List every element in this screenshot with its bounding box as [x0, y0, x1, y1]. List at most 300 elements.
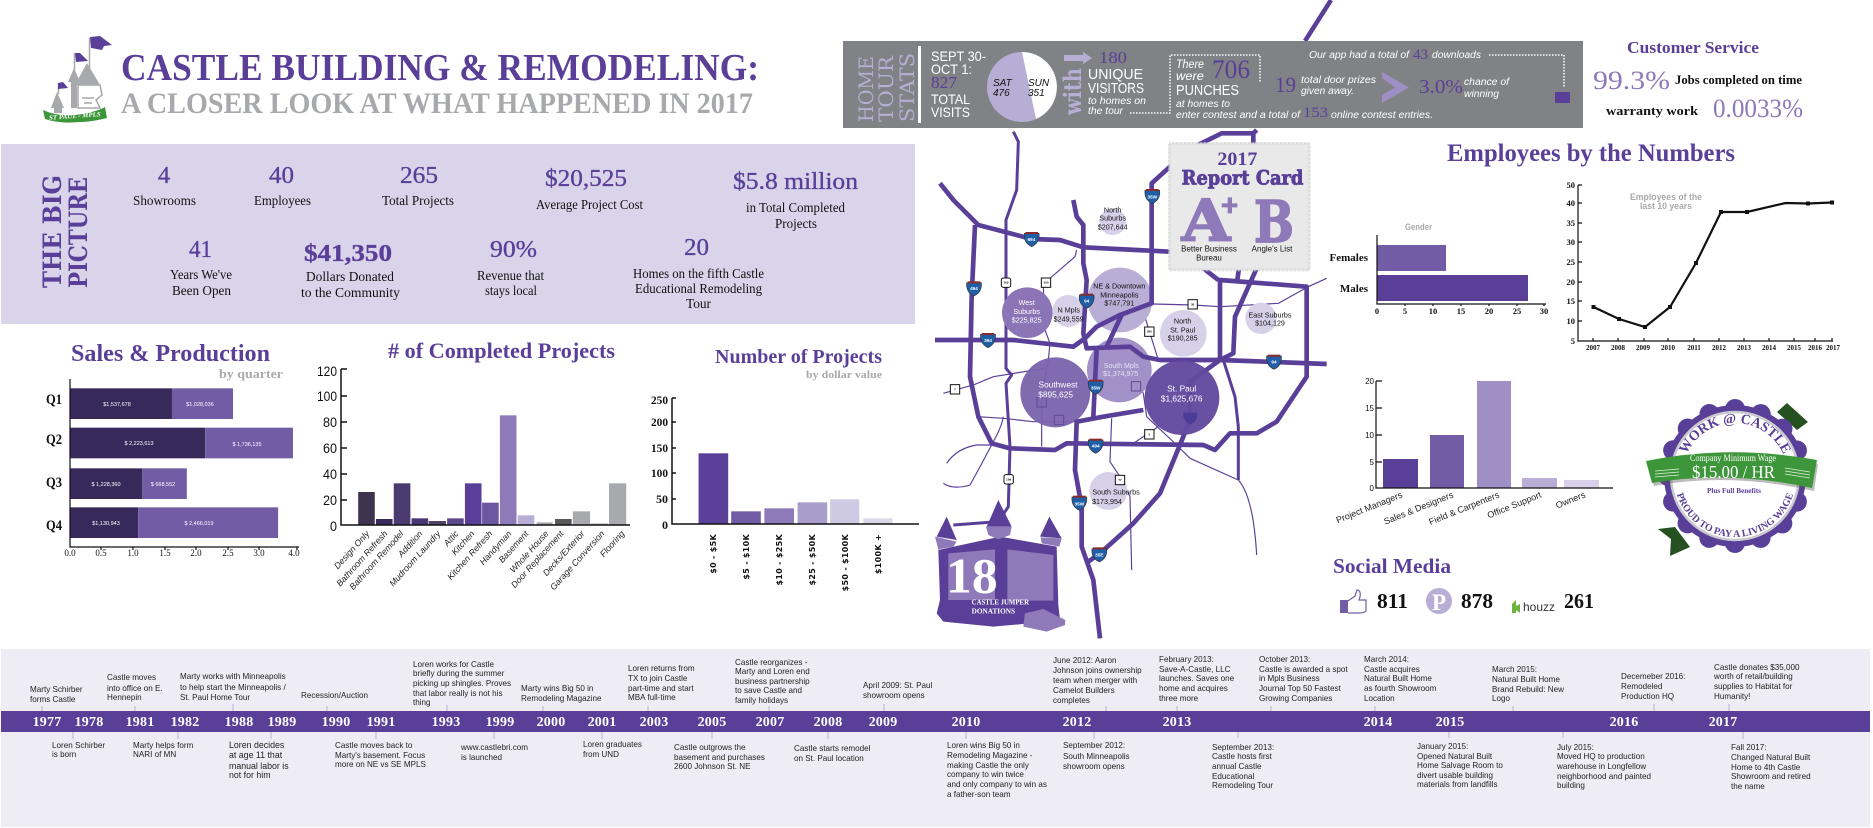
heading: the big picture: THE BIG	[38, 175, 67, 288]
circle: North Suburbs	[1099, 208, 1126, 235]
timeline band with years: 1977	[33, 715, 61, 730]
axis labels: Q4	[46, 518, 62, 534]
timeline events below the band: Remodeling Magazine -	[947, 751, 1033, 760]
stat: punches: 706	[1212, 55, 1250, 84]
route markers: 169	[1006, 477, 1011, 481]
timeline events below the band: Loren graduates	[583, 740, 642, 749]
timeline events below the band: at age 11 that	[229, 750, 283, 760]
icon: purple square	[1555, 92, 1570, 103]
panel: report card: Report Card	[1182, 166, 1304, 189]
panel: social media	[1333, 554, 1594, 615]
timeline band with years: 2005	[698, 715, 726, 730]
stat: total projects: Total Projects	[382, 193, 454, 208]
castle jumper donations	[935, 500, 1065, 632]
stat: chance of winning: winning	[1464, 89, 1499, 100]
chart: employees over last 10 years: 10	[1566, 316, 1575, 326]
timeline band with years: 2015	[1436, 715, 1464, 730]
stat: punches: at homes to	[1176, 99, 1230, 110]
timeline events below the band: January 2015:	[1417, 742, 1468, 751]
x axis ticks: 2.5	[222, 548, 234, 558]
timeline events below the band: not for him	[229, 770, 271, 780]
timeline events above the band: briefly during the summer	[413, 669, 505, 678]
x axis category labels: Addition	[395, 529, 425, 560]
chart: employees by role: 0	[1370, 484, 1375, 493]
timeline events below the band: annual Castle	[1212, 762, 1262, 771]
panel: customer service: 0.0033%	[1713, 94, 1803, 123]
timeline band with years: 2000	[537, 715, 565, 730]
ribbon tails	[1658, 403, 1808, 556]
timeline events below the band: divert usable building	[1417, 771, 1493, 780]
timeline events above the band: that labor really is not his	[413, 689, 503, 698]
timeline band with years: 2003	[640, 715, 668, 730]
stat: total projects: 265	[400, 163, 438, 189]
interstate shields: 35E	[1095, 553, 1103, 558]
circle: East Suburbs	[1245, 303, 1277, 334]
stacked bars: $1,130,943	[92, 521, 120, 527]
x axis labels: $10 - $25K	[775, 534, 784, 586]
timeline events above the band: Hennepin	[107, 693, 142, 702]
stacked bars: $ 2,466,019	[184, 521, 214, 527]
panel: customer service: Jobs completed on time	[1675, 72, 1802, 87]
timeline events above the band	[30, 655, 1800, 707]
x axis labels: $25 - $50K	[808, 534, 817, 586]
chart: employees over last 10 years: 20	[1566, 277, 1575, 287]
timeline events below the band: 2600 Johnson St. NE	[674, 762, 751, 771]
x axis category labels: Decks/Exterior	[541, 528, 587, 578]
stat: unique visitors	[1088, 48, 1146, 117]
timeline events above the band: to save Castle and	[735, 686, 802, 695]
timeline events above the band: Johnson joins ownership	[1053, 666, 1142, 675]
map labels: $173,954	[1092, 498, 1122, 506]
chart: employees over last 10 years: 15	[1566, 296, 1575, 306]
stat: employees	[254, 163, 311, 208]
pie chart: saturday vs sunday visits: SUN	[1028, 78, 1050, 89]
x axis category labels: Door Replacement	[509, 528, 566, 590]
panel: report card: 2017	[1217, 149, 1257, 170]
chart: employees over last 10 years: 2007	[1586, 344, 1600, 352]
timeline band with years: 1978	[75, 715, 103, 730]
map labels: St. Paul	[1167, 384, 1196, 394]
timeline events above the band: March 2014:	[1364, 655, 1409, 664]
stat: employees: Employees	[254, 193, 311, 208]
chart: number of projects by dollar value	[651, 346, 919, 591]
x axis labels: $100K +	[874, 534, 883, 574]
stat: chance of winning: chance of	[1464, 77, 1510, 88]
timeline events below the band: South Minneapolis	[1063, 752, 1130, 761]
timeline band with years: 1993	[432, 715, 460, 730]
timeline events below the band: materials from landfills	[1417, 780, 1498, 789]
stat: homes on tour: Homes on the fifth Castle	[633, 266, 764, 281]
route markers: 7	[954, 387, 956, 391]
icon: pinterest	[1426, 588, 1452, 615]
timeline events above the band: Humanity!	[1714, 692, 1750, 701]
map labels: West	[1019, 299, 1035, 307]
scalloped badge	[1664, 405, 1806, 547]
chart: employees over last 10 years: 2011	[1687, 344, 1701, 352]
map labels: Suburbs	[1013, 308, 1040, 316]
heading: social media: Social Media	[1333, 554, 1452, 578]
timeline events above the band: March 2015:	[1492, 665, 1537, 674]
map labels: $225,825	[1012, 317, 1042, 325]
timeline events above the band: Marty and Loren end	[735, 667, 810, 676]
stat: total visits: VISITS	[931, 104, 970, 120]
timeline events below the band: July 2015:	[1557, 743, 1594, 752]
timeline band with years: 2007	[756, 715, 784, 730]
stat: revenue stays local: stays local	[485, 283, 537, 298]
timeline events above the band: three more	[1159, 694, 1199, 703]
timeline events above the band: Marty works with Minneapolis	[180, 672, 286, 681]
stat: total visits	[931, 48, 986, 120]
stacked bars: $1,537,678	[103, 402, 131, 408]
timeline events above the band: St. Paul Home Tour	[180, 693, 250, 702]
timeline events above the band: Logo	[1492, 694, 1511, 703]
heading: home tour stats: TOUR	[874, 55, 898, 122]
x axis category labels: Attic	[441, 528, 461, 549]
y axis labels: 200	[651, 415, 668, 429]
x axis ticks: 0.0	[64, 548, 76, 558]
chart: employees by role: 10	[1365, 431, 1375, 440]
stat: punches: were	[1176, 69, 1204, 83]
count: pinterest: 878	[1461, 589, 1493, 613]
stat: total visits: TOTAL	[931, 91, 970, 107]
circle: South Mpls	[1087, 338, 1152, 402]
timeline events below the band: more on NE vs SE MPLS	[335, 760, 426, 769]
y axis labels: 100	[317, 388, 337, 404]
chart: employees over last 10 years: 2015	[1787, 344, 1802, 352]
y axis labels: 150	[651, 441, 668, 455]
chart: gender bars	[1330, 222, 1548, 316]
castle jumper donations: DONATIONS	[972, 608, 1015, 616]
timeline events below the band: from UND	[583, 750, 619, 759]
timeline events below the band: Castle hosts first	[1212, 752, 1273, 761]
chart: employees over last 10 years	[1566, 180, 1840, 352]
x axis category labels: Garage Conversion	[548, 529, 607, 592]
panel: report card: A	[1181, 187, 1232, 255]
map labels: North	[1174, 318, 1191, 326]
stat: app downloads: downloads	[1432, 50, 1481, 61]
count: facebook: 811	[1377, 589, 1408, 613]
heading: employees by the numbers: Employees by the Numbers	[1447, 140, 1735, 167]
chart: employees over last 10 years: Employees of the	[1630, 192, 1702, 202]
stat: punches	[1176, 55, 1433, 121]
x axis labels	[709, 534, 883, 591]
bars	[699, 453, 892, 524]
x axis labels: $0 - $5K	[709, 534, 718, 574]
timeline events below the band	[52, 740, 1811, 799]
circle: St Paul	[1145, 360, 1219, 435]
heading: the big picture: PICTURE	[64, 177, 93, 288]
timeline events below the band: Showroom and retired	[1731, 772, 1811, 781]
timeline band with years: 2012	[1063, 715, 1091, 730]
stat: unique visitors: 180	[1099, 48, 1127, 67]
stacked bars: $ 1,228,360	[91, 482, 121, 488]
timeline events above the band: Marty Schirber	[30, 685, 83, 694]
chart: employees by role: Owners	[1554, 489, 1587, 510]
map labels: East Suburbs	[1249, 312, 1292, 320]
timeline events above the band: picking up shingles. Proves	[413, 679, 511, 688]
timeline band with years: 2008	[814, 715, 842, 730]
arrow: with: with	[1058, 68, 1087, 116]
stat: total visits: 827	[931, 73, 958, 92]
timeline events below the band: Marty's basement. Focus	[335, 751, 425, 760]
stat: years open: Been Open	[172, 283, 231, 298]
timeline events below the band: Remodeling Tour	[1212, 781, 1273, 790]
timeline events below the band: building	[1557, 781, 1585, 790]
stat: total completed projects: in Total Completed	[746, 200, 845, 215]
map labels: North	[1104, 207, 1121, 215]
arc text: work at castle: WORK @ CASTLE	[1678, 414, 1791, 454]
timeline events below the band: September 2012:	[1063, 741, 1125, 750]
x axis category labels: Bathroom Refresh	[334, 529, 390, 588]
stat: homes on tour	[633, 235, 764, 311]
chart: employees over last 10 years: 40	[1566, 198, 1575, 208]
axis labels	[46, 392, 62, 534]
chart: gender bars: 15	[1457, 306, 1465, 316]
timeline events below the band: the name	[1731, 782, 1765, 791]
timeline events above the band: Decemeber 2016:	[1621, 672, 1685, 681]
stat: unique visitors: UNIQUE	[1088, 66, 1143, 83]
timeline band with years	[1, 711, 1870, 732]
icon: thumbs up	[1340, 590, 1366, 613]
timeline events above the band: February 2013:	[1159, 655, 1214, 664]
timeline events above the band: Castle acquires	[1364, 665, 1420, 674]
stat: door prizes: given away.	[1301, 86, 1354, 97]
timeline events above the band: Location	[1364, 694, 1395, 703]
stat: punches: enter contest and a total of	[1176, 110, 1301, 121]
timeline events above the band: Journal Top 50 Fastest	[1259, 684, 1341, 693]
stat: punches: online contest entries.	[1331, 110, 1433, 121]
y axis labels: 60	[323, 440, 337, 456]
stat: dollars donated: to the Community	[301, 285, 400, 300]
timeline events below the band: Loren wins Big 50 in	[947, 741, 1020, 750]
x axis category labels: Mudroom Laundry	[387, 528, 443, 588]
y axis labels	[317, 363, 337, 534]
heading: sales and production: Sales & Production	[71, 341, 270, 367]
timeline band with years: 2010	[952, 715, 980, 730]
interstate shields: 494	[970, 286, 978, 291]
pie chart: saturday vs sunday visits: SAT	[993, 78, 1013, 89]
map labels: $104,129	[1255, 320, 1285, 328]
y axis labels: 0	[330, 518, 337, 534]
chart: employees over last 10 years: 35	[1566, 218, 1575, 228]
map labels: St. Paul	[1170, 327, 1196, 335]
chart: gender bars: 20	[1485, 306, 1493, 316]
chart: employees over last 10 years: 2016	[1808, 344, 1822, 352]
y axis labels: 80	[323, 414, 337, 430]
pie chart: saturday vs sunday visits: 476	[993, 88, 1010, 99]
timeline events below the band: company to win twice	[947, 770, 1024, 779]
chart: gender bars: Gender	[1405, 222, 1432, 232]
timeline events above the band: worth of retail/building	[1713, 672, 1793, 681]
y axis labels: 100	[651, 466, 668, 480]
map labels: $249,559	[1054, 316, 1084, 324]
stat: chance of winning	[1419, 76, 1510, 100]
panel: customer service: warranty work	[1606, 103, 1699, 118]
stat: punches: PUNCHES	[1176, 82, 1239, 99]
title: CASTLE BUILDING & REMODELING:	[121, 47, 759, 89]
map labels: $1,374,975	[1103, 371, 1138, 378]
timeline events above the band: June 2012: Aaron	[1053, 656, 1116, 665]
route markers: 100	[1044, 281, 1049, 285]
map labels: $1,625,676	[1161, 394, 1203, 404]
timeline events above the band: Camelot Builders	[1053, 686, 1115, 695]
chart: gender bars: 25	[1513, 306, 1521, 316]
interstate shields: 394	[984, 338, 992, 343]
interstate shields: 35W	[1075, 502, 1085, 507]
timeline events above the band: thing	[413, 698, 431, 707]
heading: number of projects: Number of Projects	[715, 346, 882, 368]
panel: customer service	[1593, 38, 1803, 123]
timeline events below the band: is born	[52, 750, 76, 759]
stat: revenue stays local: Revenue that	[477, 268, 544, 283]
stat: app downloads	[1309, 47, 1481, 63]
stat: showrooms: Showrooms	[133, 193, 196, 208]
timeline events below the band: Marty helps form	[133, 741, 194, 750]
green ribbon	[1646, 452, 1818, 491]
circle: South Suburbs	[1089, 472, 1127, 510]
timeline events above the band: Remodeled	[1621, 682, 1662, 691]
circle: Southwest	[1020, 357, 1090, 427]
timeline band with years: 2016	[1610, 715, 1638, 730]
panel: report card: B	[1254, 188, 1294, 256]
x axis labels: $50 - $100K	[841, 534, 850, 591]
chart: employees by role: 20	[1365, 377, 1375, 386]
stat: punches: There	[1176, 57, 1204, 71]
timeline band with years: 1981	[126, 715, 154, 730]
green ribbon: Company Minimum Wage	[1690, 454, 1776, 464]
chart: employees by role: Field & Carpenters	[1427, 489, 1501, 527]
timeline events above the band: Growing Companies	[1259, 694, 1332, 703]
timeline events above the band: to help start the Minneapolis /	[180, 683, 286, 692]
stat: chance of winning: 3.0%	[1419, 76, 1463, 98]
timeline events above the band: MBA full-time	[628, 693, 676, 702]
stat: years open: 41	[189, 237, 212, 263]
interstate shields: 94	[1271, 360, 1277, 365]
stat: unique visitors: to homes on	[1088, 96, 1146, 107]
timeline band with years: 2013	[1163, 715, 1191, 730]
interstate shields: 694	[1027, 237, 1036, 242]
stat: app downloads: Our app had a total of	[1309, 50, 1410, 61]
timeline events above the band: Natural Built Home	[1364, 674, 1432, 683]
map labels: NE & Downtown	[1093, 283, 1145, 291]
green ribbon: $15.00 / HR	[1692, 462, 1775, 482]
timeline events below the band: is launched	[461, 753, 502, 762]
x axis ticks: 0.5	[95, 548, 107, 558]
heading: home tour stats: HOME	[854, 56, 878, 122]
timeline events below the band: Loren Schirber	[52, 741, 105, 750]
chart: employees over last 10 years: 5	[1571, 336, 1575, 346]
text: plus full benefits: Plus Full Benefits	[1707, 486, 1761, 495]
x axis ticks: 2.0	[190, 548, 202, 558]
route markers: 77	[1118, 478, 1122, 482]
x axis category labels: Flooring	[598, 529, 627, 559]
stat: total completed projects: Projects	[775, 216, 817, 231]
subheading: by dollar value: by dollar value	[806, 369, 882, 381]
panel: the big picture	[1, 144, 915, 324]
stacked bars: $ 668,552	[151, 482, 175, 488]
x axis category labels	[332, 528, 627, 592]
pie chart: saturday vs sunday visits	[987, 52, 1057, 122]
timeline events above the band: Natural Built Home	[1492, 675, 1560, 684]
circle: North St Paul	[1160, 310, 1207, 357]
x axis category labels: Kitchen	[449, 529, 477, 557]
panel: report card	[1169, 143, 1309, 270]
chart: employees by role: 5	[1370, 458, 1375, 467]
timeline events above the band: Remodeling Magazine	[521, 694, 602, 703]
timeline events below the band: Castle outgrows the	[674, 743, 746, 752]
timeline band with years: 1982	[171, 715, 199, 730]
stat: years open: Years We've	[170, 267, 232, 282]
chart: employees by role: Office Support	[1486, 489, 1543, 520]
panel: report card: Better Business	[1181, 245, 1237, 254]
timeline events above the band: TX to join Castle	[628, 674, 688, 683]
x axis category labels: Design Only	[332, 528, 372, 571]
timeline events below the band: Home to 4th Castle	[1731, 763, 1801, 772]
chart: employees over last 10 years: 2017	[1826, 344, 1840, 352]
map labels: $190,285	[1168, 335, 1198, 343]
count: houzz: 261	[1564, 589, 1594, 613]
timeline band with years: 1988	[225, 715, 253, 730]
map labels: Southwest	[1039, 380, 1078, 390]
x axis category labels: Kitchen Refresh	[445, 529, 495, 582]
stat: revenue stays local	[477, 237, 544, 298]
icon: chevron	[1382, 72, 1409, 103]
timeline events above the band: Save-A-Castle, LLC	[1159, 665, 1231, 674]
chart: gender bars: 30	[1540, 306, 1548, 316]
timeline events below the band: Loren decides	[229, 740, 285, 750]
timeline events above the band: completes	[1053, 696, 1090, 705]
x axis ticks: 4.0	[288, 548, 300, 558]
timeline events above the band: October 2013:	[1259, 655, 1310, 664]
timeline events below the band: on St. Paul location	[794, 754, 864, 763]
stat: average project cost	[536, 166, 643, 212]
chart: employees by role: Sales & Designers	[1382, 489, 1455, 527]
x axis labels: $5 - $10K	[742, 534, 751, 580]
stat: total completed projects	[733, 169, 858, 231]
heading: home tour stats: STATS	[895, 53, 919, 122]
timeline band with years: 1989	[268, 715, 296, 730]
chart: employees over last 10 years: 2009	[1636, 344, 1650, 352]
timeline band with years: 1990	[322, 715, 350, 730]
timeline events above the band: as fourth Showroom	[1364, 684, 1437, 693]
stat: homes on tour: 20	[684, 235, 709, 261]
logo: castle with flags and banner	[43, 36, 112, 123]
timeline events below the band: Changed Natural Built	[1731, 753, 1811, 762]
timeline events below the band: NARI of MN	[133, 750, 176, 759]
icon: pinterest: P	[1432, 590, 1446, 615]
route markers: 5	[1148, 432, 1150, 436]
y axis labels: 50	[656, 492, 668, 506]
timeline events above the band: team when merger with	[1053, 676, 1137, 685]
timeline events above the band: April 2009: St. Paul	[863, 681, 932, 690]
timeline events above the band: Brand Rebuild: New	[1492, 685, 1564, 694]
timeline band with years: 1991	[367, 715, 395, 730]
stat: unique visitors: the tour	[1088, 106, 1124, 117]
map labels: N Mpls	[1058, 307, 1080, 315]
stat: showrooms: 4	[158, 163, 170, 189]
timeline band with years: 2017	[1709, 715, 1737, 730]
timeline events below the band: Opened Natural Built	[1417, 752, 1493, 761]
timeline events below the band: Castle moves back to	[335, 741, 413, 750]
chart: employees over last 10 years: 2010	[1661, 344, 1676, 352]
chart: gender bars: 5	[1403, 306, 1407, 316]
timeline events above the band: home and acquires	[1159, 684, 1228, 693]
stat: door prizes	[1275, 72, 1376, 97]
heading: the big picture	[38, 175, 93, 288]
stat: average project cost: Average Project Cost	[536, 197, 643, 212]
chart: number of completed projects	[317, 338, 630, 592]
stat: dollars donated: $41,350	[304, 241, 392, 267]
